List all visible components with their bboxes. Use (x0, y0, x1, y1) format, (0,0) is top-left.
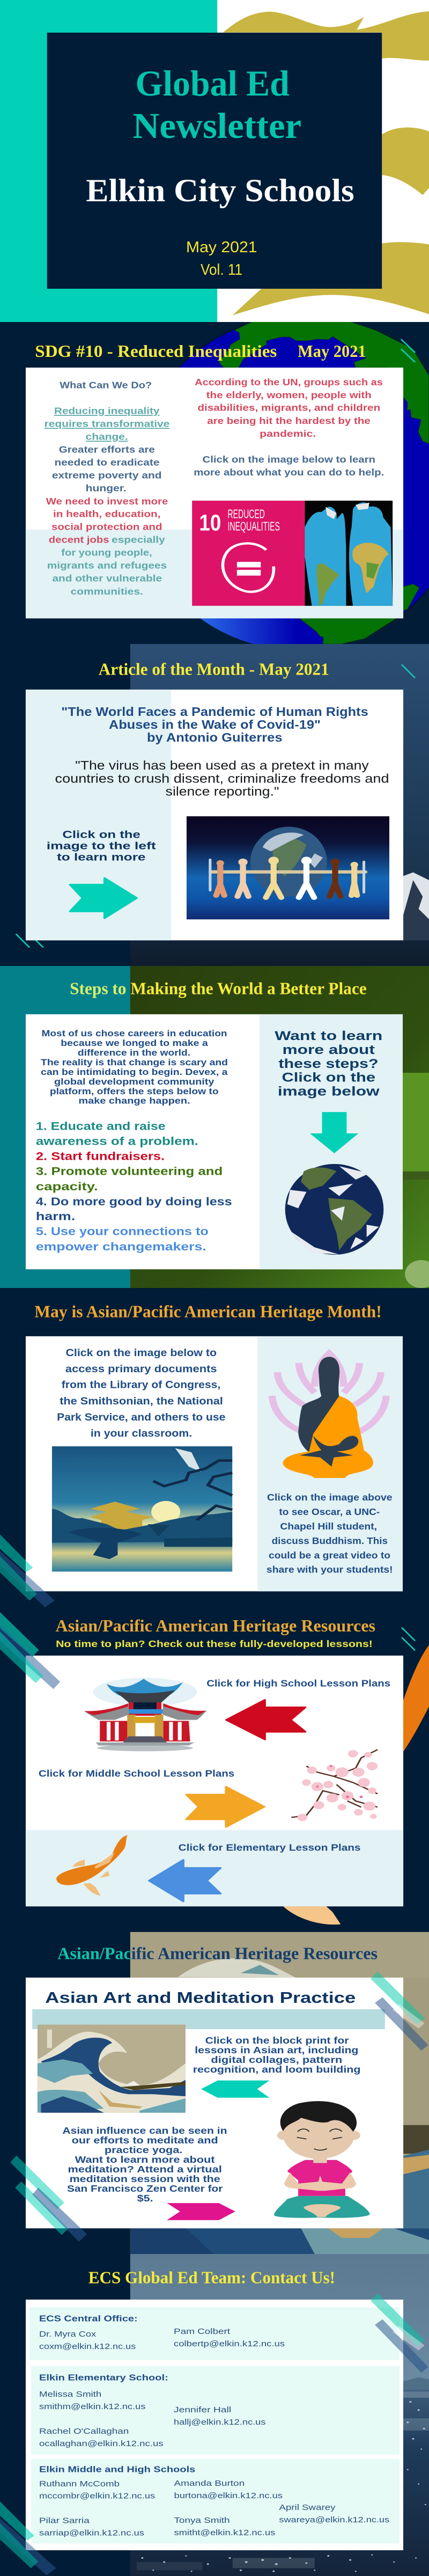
click prompt: these steps? (278, 1057, 379, 1071)
steps list: 5. Use your connections to (36, 1225, 209, 1238)
card: middle and high schools: April Swarey (279, 2503, 336, 2512)
image: pagoda at night (52, 1446, 232, 1571)
right column text: are being hit the hardest by the (207, 416, 371, 426)
left column text: hunger. (86, 483, 127, 494)
left column text: communities. (71, 587, 143, 597)
card: elementary school: Elkin Elementary School: (39, 2373, 168, 2383)
link: middle school: Click for Middle School Lesson Plans (39, 1768, 234, 1779)
intro text: The reality is that change is scary and (41, 1057, 228, 1067)
link: high school: Click for High School Lesson Plans (206, 1678, 390, 1689)
section: contact (0, 2254, 429, 2576)
intro text: platform, offers the steps below to (50, 1086, 219, 1096)
card: middle and high schools: Ruthann McComb (39, 2479, 120, 2488)
card: central office: Dr. Myra Cox (39, 2329, 97, 2338)
intro text: can be intimidating to begin. Devex, a (41, 1067, 228, 1077)
deco bands: right (371, 2293, 428, 2373)
card: middle and high schools: smitht@elkin.k12.nc.us (174, 2528, 275, 2537)
left column text: Reducing inequality (54, 406, 160, 416)
issue date: Vol. 11 (201, 261, 242, 279)
illustration: koi (56, 1835, 128, 1896)
card: elementary school: Rachel O'Callaghan (39, 2426, 129, 2435)
blurred leaf background (130, 966, 429, 1288)
right column text (194, 377, 384, 478)
heading: SDG #10 - Reduced Inequalities (35, 342, 277, 361)
title: Global Ed Newsletter: Global Ed (136, 63, 290, 104)
image: people around the globe (187, 816, 389, 919)
text: meditation: meditation? Attend a virtual (68, 2164, 222, 2175)
article title: Abuses in the Wake of Covid-19" (109, 718, 321, 731)
click prompt (275, 1029, 382, 1099)
link: elementary: Click for Elementary Lesson Plans (179, 1842, 360, 1853)
text: block print: digital collages, pattern (211, 2055, 342, 2065)
arrow: pink ribbon (167, 2203, 235, 2220)
click prompt: image below (278, 1084, 380, 1099)
right column text: According to the UN, groups such as (195, 377, 383, 387)
left column text: and other vulnerable (52, 573, 162, 584)
click prompt: Want to learn (275, 1029, 382, 1043)
left column text (45, 380, 170, 597)
title: Global Ed Newsletter (132, 63, 301, 146)
arrow: right (70, 878, 137, 918)
text: primary documents: in your classroom. (91, 1428, 192, 1439)
card: middle and high schools (31, 2459, 400, 2544)
text: Buddhism video: Click on the image above (267, 1492, 393, 1503)
click prompt: Click on the (62, 829, 140, 840)
card: middle and high schools: Tonya Smith (174, 2515, 230, 2524)
sparkles (137, 2391, 429, 2572)
card: middle and high schools: burtona@elkin.k12.nc.us (174, 2491, 283, 2500)
text: Buddhism video: share with your students! (267, 1564, 393, 1575)
article quote: countries to crush dissent, criminalize freedoms and (55, 772, 389, 785)
left column text: We need to invest more (46, 496, 168, 507)
image: SDG 10 reduced inequalities: 10 (199, 509, 221, 536)
deco strokes (401, 339, 415, 362)
heading: ECS Global Ed Team: Contact Us! (88, 2269, 335, 2287)
left column text: for young people, (61, 547, 152, 558)
article title: "The World Faces a Pandemic of Human Rights (61, 705, 368, 719)
left column text: migrants and refugees (47, 560, 167, 571)
right column text: pandemic. (260, 429, 316, 439)
card: central office: ECS Central Office: (39, 2314, 138, 2324)
subtitle: Elkin City Schools: Elkin City Schools (86, 173, 354, 209)
text: primary documents: Park Service, and others to use (57, 1411, 225, 1423)
intro text: difference in the world. (78, 1048, 190, 1058)
card: middle and high schools: swareya@elkin.k12.nc.us (279, 2515, 389, 2524)
illustration: cherry blossom (291, 1750, 378, 1821)
section: article of the month (0, 644, 429, 966)
text: meditation: Asian influence can be seen in (62, 2126, 227, 2136)
deco bands: right (371, 1971, 428, 2051)
intro text: make change happen. (78, 1096, 190, 1106)
left column text: Greater efforts are (59, 444, 155, 455)
mountain background (130, 644, 429, 966)
left column text: extreme poverty and (52, 470, 162, 481)
text: primary documents: Click on the image below to (65, 1347, 217, 1358)
text: Buddhism video: could be a great video to (269, 1550, 390, 1561)
article title: by Antonio Guiterres (147, 731, 283, 744)
intro text (41, 1028, 228, 1106)
panel: lesson plans (26, 1656, 403, 1906)
text: primary documents: from the Library of Congress, (62, 1379, 220, 1391)
hands with world map (305, 507, 346, 606)
intro text: global development community (54, 1077, 214, 1087)
text: primary documents: the Smithsonian, the National (60, 1395, 223, 1407)
article quote (55, 759, 389, 798)
right column text: more about what you can do to help. (194, 467, 384, 478)
click prompt: more about (283, 1043, 375, 1057)
card: middle and high schools: Pilar Sarria (39, 2516, 90, 2525)
steps list: harm. (36, 1210, 75, 1223)
paper people (210, 860, 365, 898)
click prompt (47, 829, 156, 863)
arrow: down (310, 1112, 358, 1153)
card: elementary school: ocallaghan@elkin.k12.nc.us (39, 2439, 164, 2448)
left column text: social protection and (51, 522, 162, 532)
text: Buddhism video (267, 1492, 393, 1575)
steps list: 2. Start fundraisers. (36, 1150, 165, 1163)
arrow: teal ribbon (201, 2081, 270, 2098)
text: block print: Click on the block print for (205, 2036, 349, 2046)
text: Buddhism video: discuss Buddhism. This (272, 1536, 388, 1546)
intro text: Most of us chose careers in education (42, 1028, 227, 1038)
steps list: 1. Educate and raise (36, 1120, 166, 1132)
text: meditation: our efforts to meditate and (72, 2135, 218, 2146)
panel: art and meditation (26, 1978, 403, 2228)
illustration: Buddha (272, 1353, 386, 1478)
panel title: Asian Art and Meditation Practice (45, 1989, 356, 2007)
text: meditation: $5. (137, 2193, 153, 2204)
deco bands: left (0, 2501, 56, 2575)
illustration: pagoda (84, 1678, 206, 1751)
card: elementary school: Melissa Smith (39, 2389, 101, 2398)
card: central office: Pam Colbert (174, 2326, 230, 2336)
article quote: silence reporting." (166, 785, 279, 798)
issue date (186, 238, 257, 279)
section: art and meditation (0, 1932, 429, 2254)
right column text: the elderly, women, people with (206, 390, 372, 400)
card: elementary school: Jennifer Hall (174, 2405, 231, 2414)
steps list: 3. Promote volunteering and (36, 1165, 223, 1178)
image: SDG 10 reduced inequalities: INEQUALITIES (227, 519, 280, 533)
image: SDG 10 reduced inequalities (192, 501, 393, 606)
article quote: "The virus has been used as a pretext in many (75, 759, 369, 772)
article title (61, 705, 368, 744)
great wave background (130, 1932, 429, 2254)
click prompt: Click on the (282, 1070, 375, 1085)
text: meditation: practice yoga. (105, 2145, 182, 2155)
text: Buddhism video: Chapel Hill student, (280, 1521, 377, 1532)
issue date: May 2021 (186, 238, 257, 256)
steps list (36, 1120, 232, 1253)
heading: May 2021 (298, 342, 366, 361)
title: Global Ed Newsletter: Newsletter (132, 106, 301, 146)
subheading: No time to plan? Check out these fully-developed lessons! (56, 1639, 373, 1649)
text: meditation: meditation session with the (70, 2174, 220, 2184)
text: primary documents (57, 1347, 225, 1439)
card: central office: colbertp@elkin.k12.nc.us (174, 2339, 285, 2348)
left column text: decent jobs (49, 535, 109, 545)
card: elementary school (31, 2366, 400, 2454)
deco bands: left (10, 2155, 87, 2242)
left column text: needed to eradicate (55, 457, 160, 468)
deco strokes (402, 1628, 415, 1650)
sea background (130, 2254, 429, 2576)
section: SDG 10 (0, 316, 429, 650)
section: heritage month (0, 1288, 429, 1610)
text: primary documents: access primary documents (65, 1363, 217, 1374)
steps list: 4. Do more good by doing less (36, 1195, 232, 1208)
card: middle and high schools: Elkin Middle and High Schools (39, 2465, 195, 2475)
left column text: What Can We Do? (60, 380, 152, 391)
text: Buddhism video: to see Oscar, a UNC- (279, 1507, 380, 1517)
text: meditation: Want to learn more about (75, 2155, 215, 2165)
panel: article (26, 690, 403, 940)
card: middle and high schools: Amanda Burton (174, 2478, 245, 2487)
steps list: empower changemakers. (36, 1240, 206, 1253)
intro text: because we longed to make a (61, 1038, 209, 1048)
text: block print (193, 2036, 360, 2075)
card: middle and high schools: mccombr@elkin.k12.nc.us (39, 2491, 155, 2500)
card: elementary school: smithm@elkin.k12.nc.us (39, 2402, 145, 2411)
text: meditation: San Francisco Zen Center for (67, 2184, 223, 2194)
card: central office (29, 2307, 400, 2360)
deco strokes (16, 664, 415, 948)
arrow: right, orange (186, 1787, 264, 1827)
card: elementary school: hallj@elkin.k12.nc.us (174, 2417, 265, 2426)
card: central office: coxm@elkin.k12.nc.us (39, 2342, 136, 2351)
title block (47, 33, 382, 289)
text: block print: lessons in Asian art, including (195, 2045, 358, 2055)
panel: heritage month (26, 1336, 403, 1591)
heading: Article of the Month - May 2021 (99, 660, 329, 679)
image: earth (285, 1164, 383, 1255)
panel: steps (26, 1014, 403, 1269)
panel: what can we do (26, 368, 403, 618)
globe background (178, 322, 429, 644)
section: cover (0, 0, 429, 322)
right column text: Click on the image below to learn (203, 455, 375, 465)
section: steps (0, 966, 429, 1288)
deco bands (0, 1612, 60, 1689)
text: block print: recognition, and loom building (193, 2065, 360, 2075)
image: The Great Wave (38, 2025, 186, 2113)
card: middle and high schools: sarriap@elkin.k12.nc.us (39, 2528, 144, 2537)
steps list: capacity. (36, 1180, 98, 1193)
gold waves (223, 11, 429, 315)
left column text: in health, education, (53, 509, 160, 519)
text: meditation (62, 2126, 227, 2204)
arrow: left, red (226, 1700, 305, 1739)
arrow: left, blue (149, 1860, 220, 1901)
panel: contacts (26, 2300, 403, 2550)
right column text: disabilities, migrants, and children (197, 402, 380, 413)
image: SDG 10 reduced inequalities: REDUCED (227, 507, 265, 521)
click prompt: to learn more (57, 852, 145, 863)
illustration: meditating boy (274, 2101, 370, 2218)
click prompt: image to the left (47, 840, 156, 852)
section: lesson resources (0, 1610, 429, 1932)
left column text: especially (112, 535, 165, 545)
left column text: change. (86, 431, 128, 442)
steps list: awareness of a problem. (36, 1135, 198, 1147)
deco bands (0, 1534, 55, 1607)
left column text: requires transformative (45, 419, 170, 429)
koi background (283, 1645, 429, 1924)
